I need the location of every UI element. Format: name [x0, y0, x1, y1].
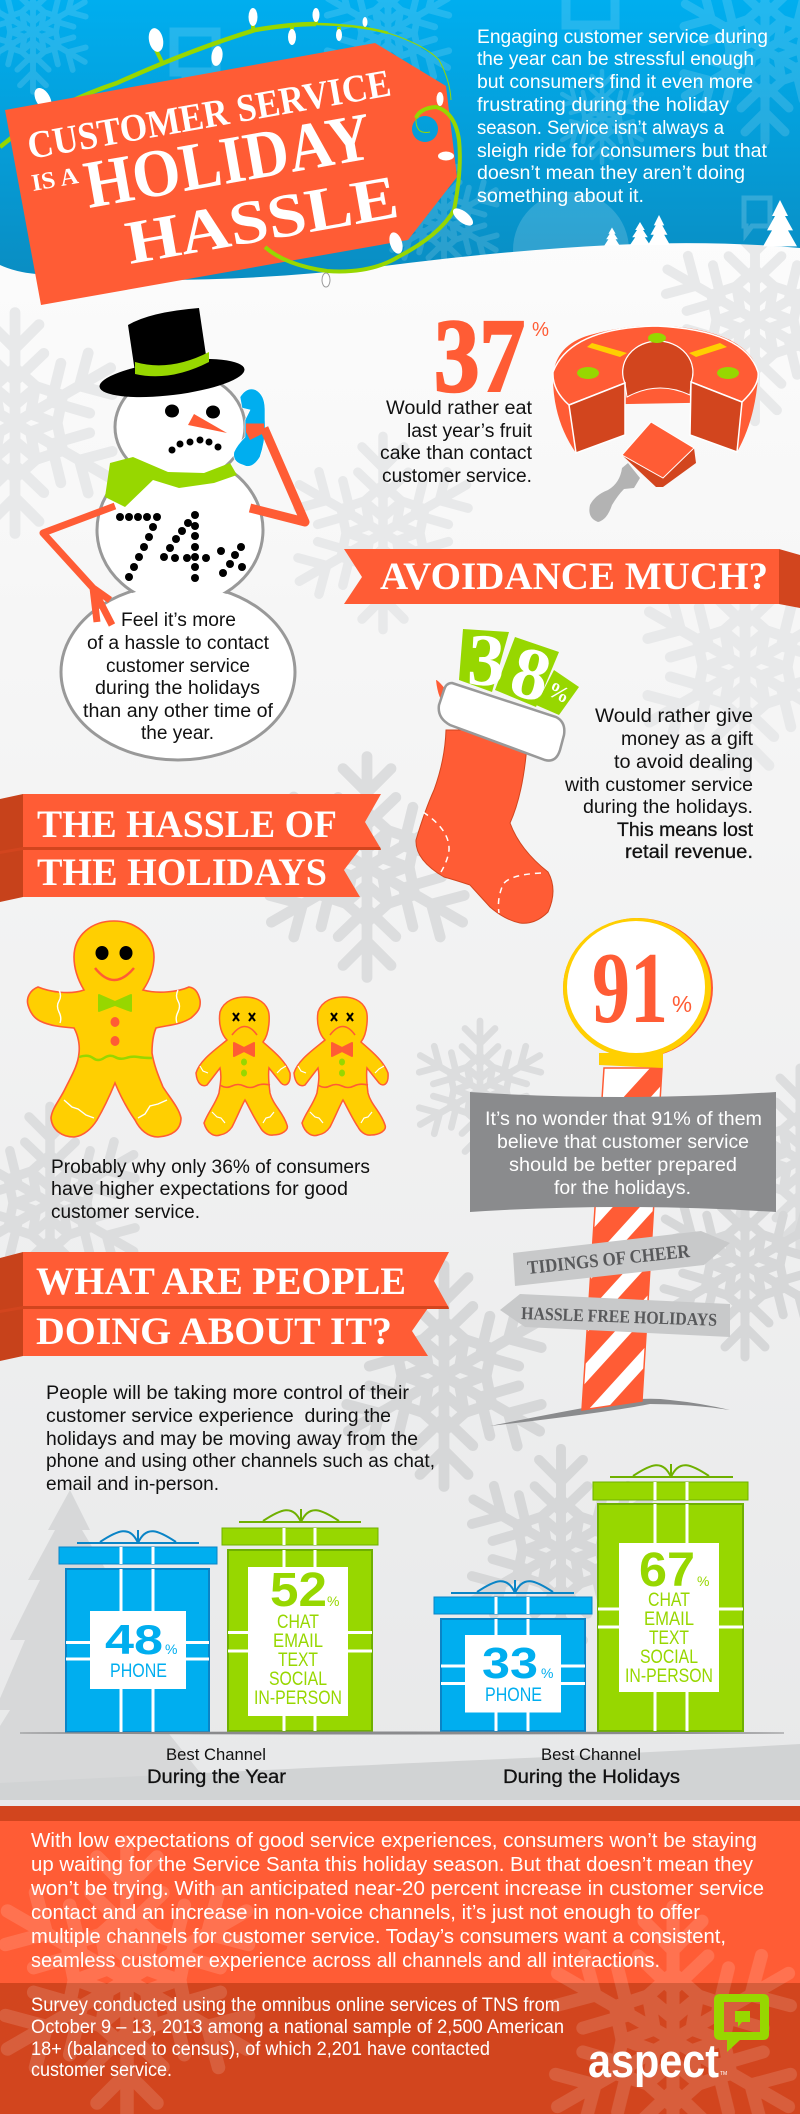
- north pole signpost: [470, 918, 776, 1475]
- survey note: Survey conducted using the omnibus online services of TNS from: [31, 1995, 560, 2016]
- left arm: [43, 506, 115, 625]
- banner text: should be better prepared: [509, 1155, 737, 1176]
- ribbon: the hassle of the holidays: THE HASSLE OF: [37, 803, 337, 846]
- intro paragraph: [477, 27, 768, 207]
- snowman caption: of a hassle to contact: [87, 633, 270, 654]
- survey note: October 9 – 13, 2013 among a national sample of 2,500 American: [31, 2017, 564, 2038]
- aspect logo: aspect: [588, 2034, 719, 2087]
- ribbon: avoidance much: AVOIDANCE MUCH?: [380, 555, 768, 598]
- ribbon: what are people doing about it: WHAT ARE PEOPLE: [36, 1260, 406, 1303]
- tidings of cheer sign: [513, 1231, 730, 1286]
- gift: 52 percent other channels during the year: CHAT: [277, 1612, 319, 1633]
- gingerbread caption: Probably why only 36% of consumers: [51, 1157, 370, 1178]
- intro paragraph: but consumers find it even more: [477, 72, 753, 93]
- striped pole: [560, 1050, 680, 1475]
- snowman hat: [97, 308, 247, 404]
- caption: during the year: During the Year: [147, 1767, 287, 1788]
- closing paragraph: up waiting for the Service Santa this holiday season. But that doesn’t mean they: [31, 1854, 753, 1876]
- caption: during the year: Best Channel: [166, 1745, 266, 1764]
- stocking caption: Would rather give: [595, 706, 753, 727]
- aspect logo: TM: [720, 2071, 727, 2077]
- intro paragraph: doesn’t mean they aren’t doing: [477, 163, 745, 184]
- banner text: for the holidays.: [554, 1178, 691, 1199]
- snowman caption: Feel it’s more: [121, 610, 236, 631]
- closing paragraph: won’t be trying. With an anticipated near-20 percent increase in customer service: [30, 1878, 764, 1900]
- gift: 52 percent other channels during the year: TEXT: [278, 1650, 318, 1671]
- closing paragraph: contact and an increase in non-voice channels, it’s just not enough to offer: [31, 1902, 700, 1924]
- gift: 48 percent phone during the year: [59, 1530, 217, 1732]
- scarf: [105, 457, 237, 507]
- gift: 67 percent other channels during the holidays: CHAT: [648, 1590, 690, 1611]
- stocking: [416, 619, 579, 923]
- tidings of cheer sign: TIDINGS OF CHEER: [526, 1241, 691, 1279]
- string of lights behind tag: [0, 8, 451, 147]
- snowman face: [165, 404, 227, 454]
- 37 percent statistic: 37: [434, 297, 525, 414]
- small gingerbread man 2: [294, 997, 388, 1136]
- snow hill at the bottom: [0, 1744, 800, 1800]
- gift tag title: HASSLE: [121, 163, 403, 278]
- gift: 48 percent phone during the year: %: [165, 1641, 177, 1657]
- money with 38 percent: 8: [503, 630, 559, 719]
- banner text: believe that customer service: [497, 1132, 749, 1153]
- stocking caption: with customer service: [564, 775, 753, 796]
- gift tag title: CUSTOMER SERVICE: [24, 62, 394, 168]
- survey note: 18+ (balanced to census), of which 2,201 have contacted: [31, 2039, 490, 2060]
- snowman caption: during the holidays: [95, 678, 260, 699]
- hassle free holidays sign: HASSLE FREE HOLIDAYS: [521, 1303, 717, 1330]
- caption: during the holidays: Best Channel: [541, 1745, 641, 1764]
- 37 percent statistic: last year’s fruit: [407, 421, 533, 442]
- gift: 67 percent other channels during the holidays: IN-PERSON: [625, 1666, 713, 1687]
- stocking caption: money as a gift: [621, 729, 754, 750]
- snowman body: [61, 372, 295, 760]
- stocking caption: during the holidays.: [583, 797, 753, 818]
- sign circle with 91 percent: 91: [592, 932, 668, 1045]
- intro paragraph: something about it.: [477, 186, 644, 207]
- gift: 67 percent other channels during the holidays: 67: [639, 1544, 695, 1597]
- 37 percent statistic: cake than contact: [380, 443, 533, 464]
- small gingerbread man 1: [196, 997, 290, 1136]
- caption: during the holidays: [503, 1745, 680, 1788]
- closing paragraph: seamless customer experience across all channels and all interactions.: [31, 1950, 660, 1972]
- caption: during the holidays: During the Holidays: [503, 1767, 680, 1788]
- intro paragraph: frustrating during the holiday: [477, 95, 730, 116]
- stocking caption: [564, 706, 754, 863]
- caption: during the year: [147, 1745, 287, 1788]
- stocking caption: This means lost: [617, 820, 754, 841]
- paragraph: taking more control: holidays and may be moving away from the: [46, 1429, 418, 1450]
- paragraph: taking more control: [46, 1383, 435, 1495]
- paragraph: taking more control: phone and using other channels such as chat,: [46, 1451, 435, 1472]
- grey tree silhouette: [0, 1490, 214, 1790]
- ribbon: avoidance much: [344, 549, 800, 608]
- gift tag title: IS A: [30, 163, 81, 197]
- paragraph: taking more control: customer service experience during the: [46, 1406, 391, 1427]
- 37 percent statistic: Would rather eat: [386, 398, 533, 419]
- snow mound: [490, 1399, 730, 1426]
- ribbon: the hassle of the holidays: THE HOLIDAYS: [37, 851, 327, 894]
- survey note: [31, 1995, 564, 2081]
- ribbon: what are people doing about it: DOING ABOUT IT?: [36, 1310, 392, 1353]
- gift: 33 percent phone during the holidays: 33: [482, 1639, 538, 1688]
- gift: 67 percent other channels during the holidays: [593, 1464, 748, 1731]
- gift: 67 percent other channels during the holidays: EMAIL: [644, 1609, 694, 1630]
- 37 percent statistic: [380, 297, 549, 487]
- footer background: [0, 1806, 800, 2114]
- grey snowflake pattern: [0, 219, 800, 1651]
- sign circle with 91 percent: [563, 918, 713, 1068]
- closing paragraph: [30, 1830, 764, 1972]
- intro paragraph: sleigh ride for consumers but that: [477, 141, 768, 162]
- paragraph: taking more control: People will be taking more control of their: [46, 1383, 410, 1404]
- aspect logo: [588, 1994, 769, 2087]
- gift tag title: HOLIDAY: [78, 98, 377, 223]
- 74% in dots: [116, 511, 246, 582]
- gift: 33 percent phone during the holidays: %: [541, 1665, 553, 1681]
- gift: 52 percent other channels during the year: IN-PERSON: [254, 1688, 342, 1709]
- big gingerbread man: [27, 921, 200, 1137]
- money with 38 percent: %: [544, 676, 574, 708]
- gingerbread caption: have higher expectations for good: [51, 1179, 348, 1200]
- money with 38 percent: 3: [466, 619, 507, 703]
- gift: 52 percent other channels during the year: 52: [270, 1564, 327, 1617]
- stocking caption: to avoid dealing: [614, 752, 753, 773]
- ground line under gifts: [20, 1732, 784, 1734]
- right arm: [246, 428, 305, 522]
- phone: [234, 389, 265, 466]
- gift: 52 percent other channels during the year: EMAIL: [273, 1631, 323, 1652]
- intro paragraph: Engaging customer service during: [477, 27, 768, 48]
- gift: 52 percent other channels during the year: [222, 1509, 378, 1731]
- intro paragraph: the year can be stressful enough: [477, 49, 754, 70]
- intro paragraph: season. Service isn’t always a: [477, 118, 724, 139]
- survey note: customer service.: [31, 2060, 172, 2081]
- header sky: [0, 0, 800, 308]
- snowman caption: customer service: [106, 656, 250, 677]
- gingerbread caption: [51, 1157, 370, 1223]
- banner text: It’s no wonder that 91% of them: [485, 1109, 762, 1130]
- snowman caption: the year.: [141, 723, 214, 744]
- 37 percent statistic: customer service.: [382, 466, 532, 487]
- closing paragraph: multiple channels for customer service. Today’s consumers want a consistent,: [31, 1926, 726, 1948]
- money with 38 percent: [459, 619, 579, 719]
- gift: 33 percent phone during the holidays: [434, 1580, 592, 1731]
- ribbon: what are people doing about it: [0, 1252, 449, 1361]
- banner text: [485, 1109, 762, 1199]
- fruit cake: [553, 326, 758, 522]
- gift: 48 percent phone during the year: 48: [105, 1616, 163, 1663]
- gift: 48 percent phone during the year: PHONE: [110, 1661, 167, 1682]
- stocking caption: retail revenue.: [625, 842, 753, 863]
- snowman caption: than any other time of: [83, 701, 274, 722]
- snowman caption: [83, 610, 274, 744]
- hassle free holidays sign: [500, 1294, 730, 1337]
- gift tag title: [5, 43, 457, 305]
- ribbon: the hassle of the holidays: [0, 794, 381, 902]
- gingerbread caption: customer service.: [51, 1202, 200, 1223]
- paragraph: taking more control: email and in-person.: [46, 1474, 219, 1495]
- sign circle with 91 percent: %: [672, 991, 692, 1017]
- gift: 67 percent other channels during the holidays: %: [697, 1573, 709, 1589]
- snowman: [43, 308, 305, 760]
- gift: 67 percent other channels during the holidays: TEXT: [649, 1628, 689, 1649]
- white trees on the horizon: [604, 200, 797, 246]
- gift: 52 percent other channels during the year: %: [327, 1593, 339, 1609]
- gift: 33 percent phone during the holidays: PHONE: [485, 1685, 542, 1706]
- grey banner: [470, 1092, 776, 1212]
- closing paragraph: With low expectations of good service experiences, consumers won’t be staying: [31, 1830, 757, 1852]
- gift: 67 percent other channels during the holidays: SOCIAL: [640, 1647, 698, 1668]
- string of lights in front of tag: [265, 92, 476, 287]
- 37 percent statistic: %: [532, 319, 549, 341]
- gift: 52 percent other channels during the year: SOCIAL: [269, 1669, 327, 1690]
